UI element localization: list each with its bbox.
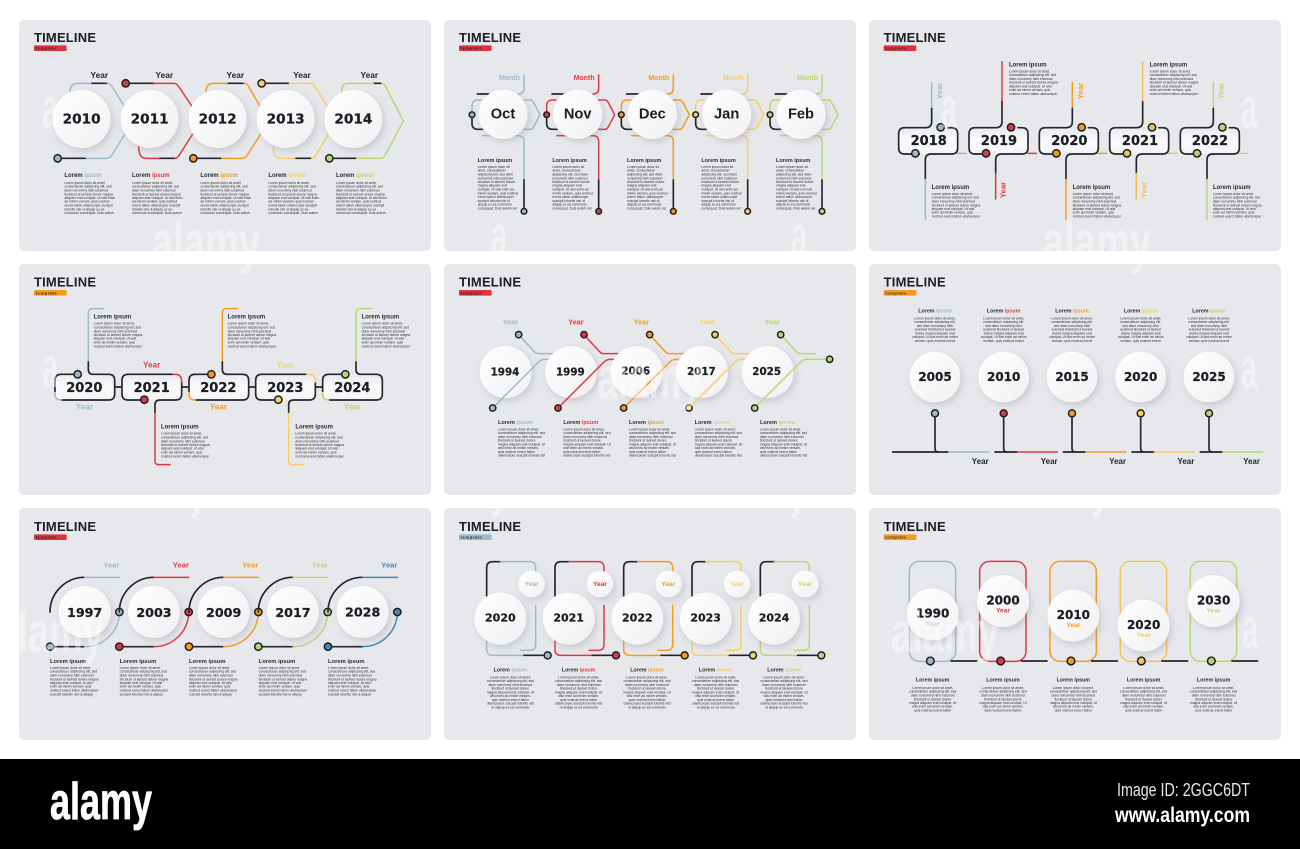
watermarks xyxy=(0,76,1258,665)
step Nov xyxy=(544,75,615,214)
step 2010 xyxy=(53,70,125,215)
step 2010: Year xyxy=(1066,622,1081,629)
step Feb: Lorem ipsum xyxy=(776,158,811,164)
step 2017 xyxy=(676,317,749,458)
step 2020: Lorem ipsum xyxy=(494,668,527,674)
step 2010: 2010 xyxy=(987,370,1020,384)
template badge xyxy=(459,290,492,296)
step Oct xyxy=(469,75,540,214)
watermarks: y xyxy=(1092,454,1108,519)
step 2024: Lorem ipsum xyxy=(362,315,399,321)
step 1997: 1997 xyxy=(67,605,102,620)
watermarks: a xyxy=(1242,596,1258,661)
step 2025: 2025 xyxy=(752,366,781,378)
step Dec xyxy=(618,75,689,214)
step 2011 xyxy=(121,70,193,215)
step 2018: Year xyxy=(935,83,944,99)
step Dec: Month xyxy=(648,75,669,82)
template badge xyxy=(34,290,67,296)
step 2024: 2024 xyxy=(759,612,790,625)
step 1994: Lorem ipsum xyxy=(498,420,533,426)
step 2017: Year xyxy=(699,317,715,326)
step 2000: Year xyxy=(996,607,1010,614)
title: TIMELINE xyxy=(459,519,521,534)
step 2021: Lorem ipsum xyxy=(562,668,596,674)
step 2019: 2019 xyxy=(981,134,1017,149)
step 2023 xyxy=(680,562,756,710)
template badge xyxy=(884,534,916,540)
template badge: template xyxy=(36,46,58,51)
step 2015: Year xyxy=(1109,457,1126,466)
step 2013: Year xyxy=(293,70,312,80)
step 2018: 2018 xyxy=(911,134,947,149)
step 2021: 2021 xyxy=(1122,134,1158,149)
step 2020 xyxy=(1115,309,1194,466)
step 2022: Year xyxy=(661,581,676,588)
step 2011: Year xyxy=(156,70,174,80)
step 2019: Year xyxy=(998,182,1007,198)
step 2024: Year xyxy=(344,403,362,412)
step 2005: Year xyxy=(972,457,989,466)
step 2020: 2020 xyxy=(66,381,102,396)
step 2014 xyxy=(324,70,403,215)
step 1990: 1990 xyxy=(916,607,949,621)
template badge: template xyxy=(885,46,907,51)
step 1999: Lorem ipsum xyxy=(563,420,598,426)
step 2021 xyxy=(543,562,619,710)
watermarks: y xyxy=(790,454,806,519)
step Dec: Dec xyxy=(639,107,666,123)
panel: timeline 2020-2024 frames xyxy=(444,508,856,740)
step 2011: Lorem ipsum xyxy=(132,173,170,179)
step 2028: Year xyxy=(381,561,397,570)
watermarks: alamy xyxy=(597,346,702,411)
step 2012: Lorem ipsum xyxy=(200,173,238,179)
step 2017: Lorem ipsum xyxy=(695,420,730,426)
step 1997 xyxy=(46,561,123,697)
step Feb: Lorem ipsum dolor sit amet, consectetuer adipiscing elit, sed diam nonummy nibh euismod tincidunt ut laoreet dolore magna aliquam erat volutpat. Ut wisi enim ad minim veniam, quis nostrud exerci tation ullamcorper suscipit lobortis nisl ut aliquip ex ea commodo consequat. Duis autem vel xyxy=(776,165,817,210)
step 2012: 2012 xyxy=(199,111,237,127)
template badge: template xyxy=(36,290,58,295)
step 1997: Year xyxy=(103,561,119,570)
title: TIMELINE xyxy=(884,275,946,290)
step 2020 xyxy=(474,562,551,710)
step 2022: 2022 xyxy=(200,381,236,396)
step 2025: Year xyxy=(1243,457,1260,466)
step 2010: Lorem ipsum xyxy=(987,309,1021,315)
template badge xyxy=(459,45,492,51)
panel: timeline 2018-2022 tags xyxy=(869,20,1281,251)
template badge: template xyxy=(461,290,483,295)
step 2022: Lorem ipsum xyxy=(1213,185,1251,191)
step Jan: Month xyxy=(723,75,744,82)
step 2022: 2022 xyxy=(622,612,653,625)
footer logo: alamy xyxy=(50,773,152,831)
step 2005 xyxy=(910,309,989,466)
step 2020 xyxy=(1039,82,1123,219)
step 2017: 2017 xyxy=(687,366,716,378)
footer bar xyxy=(0,759,1300,849)
step 2022: 2022 xyxy=(1192,134,1228,149)
step 2009: 2009 xyxy=(206,605,241,620)
step 2013: 2013 xyxy=(267,111,305,127)
step 2022 xyxy=(611,562,688,710)
watermarks: a xyxy=(1241,76,1257,141)
panel: timeline 1997-2028 arcs xyxy=(19,508,431,740)
step 2021: Lorem ipsum xyxy=(161,425,199,431)
step 2006: 2006 xyxy=(621,365,650,377)
step 2020: Year xyxy=(1137,632,1151,639)
step 2017: 2017 xyxy=(275,605,311,620)
step 2020 xyxy=(1118,561,1188,713)
step 2023: Year xyxy=(730,581,744,588)
step 2010: Year xyxy=(91,70,109,80)
step 2021: 2021 xyxy=(553,612,584,625)
step 2021: Year xyxy=(593,581,607,588)
step 2020: Year xyxy=(76,403,94,412)
watermarks: alamy xyxy=(1043,210,1151,275)
step 2021 xyxy=(1110,62,1200,199)
step 2025 xyxy=(742,317,833,458)
step 2020: Lorem ipsum xyxy=(94,315,131,321)
step 2022: Year xyxy=(210,403,228,412)
watermarks: a xyxy=(1241,336,1257,401)
step 2020: Year xyxy=(1076,83,1085,99)
template badge: template xyxy=(461,46,483,51)
website: www.alamy.com xyxy=(1114,804,1250,827)
step 2028: 2028 xyxy=(345,604,380,619)
step 2030: Year xyxy=(1207,608,1221,615)
step 2003 xyxy=(116,561,192,697)
watermarks: a xyxy=(791,204,807,269)
step 2020: 2020 xyxy=(1127,618,1160,632)
step Oct: Oct xyxy=(491,107,515,123)
connectors xyxy=(115,384,323,389)
step 2017: Lorem ipsum dolor sit amet, consectetuer adipiscing elit, sed diam nonummy nibh euismod tincidunt ut laoreet dolore magna aliquam erat volutpat. Ut wisi enim ad minim veniam, quis nostrud exerci tation ullamcorper suscipit lobortis nisl ut aliquip xyxy=(259,666,307,696)
step 1999: Year xyxy=(568,317,584,326)
step 1997: Lorem ipsum dolor sit amet, consectetuer adipiscing elit, sed diam nonummy nibh euismod tincidunt ut laoreet dolore magna aliquam erat volutpat. Ut wisi enim ad minim veniam, quis nostrud exerci tation ullamcorper suscipit lobortis nisl ut aliquip xyxy=(50,666,99,696)
step 2028: Lorem ipsum xyxy=(328,659,365,665)
step 2010: Lorem ipsum xyxy=(1057,678,1090,684)
step 1990: Year xyxy=(926,621,940,628)
step 1997: Lorem ipsum xyxy=(50,659,87,665)
step 2023: 2023 xyxy=(267,381,303,396)
step 2009 xyxy=(185,561,262,697)
step 2023: Lorem ipsum xyxy=(699,668,733,674)
step 2024 xyxy=(323,309,412,412)
step 2017: Year xyxy=(312,561,328,570)
step 2023: 2023 xyxy=(690,612,721,625)
step 2000: Lorem ipsum dolor sit amet, consectetuer adipiscing elit, sed diam nonummy nibh euismod tincidunt ut laoreet dolore magna aliquam erat volutpat. Ut wisi enim ad minim veniam, quis nostrud exerci tation xyxy=(979,686,1027,713)
step 2014: Lorem ipsum xyxy=(336,173,374,179)
step 2020: Lorem ipsum xyxy=(1127,678,1161,684)
step 2020: Year xyxy=(525,581,539,588)
step 2005: 2005 xyxy=(918,370,952,384)
step 1990 xyxy=(907,561,977,713)
step 2009: Lorem ipsum dolor sit amet, consectetuer adipiscing elit, sed diam nonummy nibh euismod tincidunt ut laoreet dolore magna aliquam erat volutpat. Ut wisi enim ad minim veniam, quis nostrud exerci tation ullamcorper suscipit lobortis nisl ut aliquip xyxy=(189,666,238,696)
step 2022 xyxy=(1180,82,1263,219)
step 2021: Year xyxy=(1140,182,1149,198)
panel: timeline 1990-2030 capsules xyxy=(869,508,1281,740)
step Oct: Month xyxy=(499,75,520,82)
step 2000 xyxy=(977,561,1047,713)
panel: timeline 2005-2025 pins xyxy=(869,264,1281,495)
step 2024: 2024 xyxy=(334,381,370,396)
step 1999 xyxy=(545,317,618,458)
template badge xyxy=(884,290,916,296)
step 2000: 2000 xyxy=(986,593,1020,607)
panel: timeline 1994-2025 branches xyxy=(444,264,856,495)
step Nov: Lorem ipsum xyxy=(552,158,587,164)
step 2020: 2020 xyxy=(485,612,516,625)
step 2025: 2025 xyxy=(1192,370,1226,384)
step 2020: Lorem ipsum dolor sit amet, consectetuer adipiscing elit, sed diam nonummy nibh euismod tincidunt ut laoreet dolore magna aliquam erat volutpat. Ut wisi enim ad minim veniam, quis nostrud exerci tation xyxy=(1120,686,1167,713)
template badge xyxy=(459,534,492,540)
watermarks: a xyxy=(491,204,507,269)
step 2022: Lorem ipsum xyxy=(630,668,664,674)
step 2022: Lorem ipsum xyxy=(228,315,265,321)
step Jan xyxy=(693,75,764,214)
step Dec: Lorem ipsum dolor sit amet, consectetuer adipiscing elit, sed diam nonummy nibh euismod tincidunt ut laoreet dolore magna aliquam erat volutpat. Ut wisi enim ad minim veniam, quis nostrud exerci tation ullamcorper suscipit lobortis nisl ut aliquip ex ea commodo consequat. Duis autem vel xyxy=(627,165,668,210)
step 2015 xyxy=(1047,309,1126,466)
watermarks: alamy xyxy=(891,600,999,665)
title: TIMELINE xyxy=(884,519,946,534)
template badge: template xyxy=(36,535,58,540)
step 2017: Lorem ipsum xyxy=(259,659,295,665)
title: TIMELINE xyxy=(459,30,521,45)
step 2003: Year xyxy=(173,561,189,570)
step 2012: Year xyxy=(227,70,245,80)
step 2025 xyxy=(1184,309,1263,466)
step Oct: Lorem ipsum xyxy=(478,158,512,164)
step 2000: Lorem ipsum xyxy=(986,678,1020,684)
step Feb: Feb xyxy=(788,107,814,123)
step 2013 xyxy=(257,70,328,215)
image id: Image ID: 2GGC6DT xyxy=(1117,780,1250,800)
step Oct: Lorem ipsum dolor sit amet, consectetuer adipiscing elit, sed diam nonummy nibh euismod tincidunt ut laoreet dolore magna aliquam erat volutpat. Ut wisi enim ad minim veniam, quis nostrud exerci tation ullamcorper suscipit lobortis nisl ut aliquip ex ea commodo consequat. Duis autem vel xyxy=(478,165,518,210)
step 2003: Lorem ipsum dolor sit amet, consectetuer adipiscing elit, sed diam nonummy nibh euismod tincidunt ut laoreet dolore magna aliquam erat volutpat. Ut wisi enim ad minim veniam, quis nostrud exerci tation ullamcorper suscipit lobortis nisl ut aliquip xyxy=(120,666,168,696)
step 2030: Lorem ipsum xyxy=(1197,678,1231,684)
panel: timeline 2010-2014 hexagon xyxy=(19,20,431,251)
title: TIMELINE xyxy=(34,30,96,45)
step 2005: Lorem ipsum xyxy=(918,309,952,315)
step 2018 xyxy=(899,82,982,219)
step 2020: Lorem ipsum xyxy=(1073,185,1110,191)
step 2014: Year xyxy=(361,70,379,80)
step Jan: Lorem ipsum dolor sit amet, consectetuer adipiscing elit, sed diam nonummy nibh euismod tincidunt ut laoreet dolore magna aliquam erat volutpat. Ut wisi enim ad minim veniam, quis nostrud exerci tation ullamcorper suscipit lobortis nisl ut aliquip ex ea commodo consequat. Duis autem vel xyxy=(701,165,742,210)
step 2010: 2010 xyxy=(1057,608,1090,622)
step 2010: 2010 xyxy=(63,111,101,127)
step 2028: Lorem ipsum dolor sit amet, consectetuer adipiscing elit, sed diam nonummy nibh euismod tincidunt ut laoreet dolore magna aliquam erat volutpat. Ut wisi enim ad minim veniam, quis nostrud exerci tation ullamcorper suscipit lobortis nisl ut aliquip xyxy=(328,666,377,696)
template badge xyxy=(34,45,67,51)
step 2021: Lorem ipsum xyxy=(1150,62,1187,68)
step 2014: 2014 xyxy=(334,111,372,127)
step Feb: Month xyxy=(797,75,818,82)
watermarks: a xyxy=(42,76,58,141)
template badge: template xyxy=(885,290,907,295)
step 2010: Year xyxy=(1041,457,1058,466)
step 2020: 2020 xyxy=(1124,370,1157,384)
title: TIMELINE xyxy=(34,519,96,534)
template badge xyxy=(34,534,67,540)
step 2021: 2021 xyxy=(134,381,170,396)
watermarks: alamy xyxy=(152,210,260,275)
step 2020: 2020 xyxy=(1051,134,1087,149)
axis start xyxy=(893,449,926,454)
watermarks: y xyxy=(491,454,507,519)
step 2028 xyxy=(324,561,401,697)
step Feb xyxy=(767,75,838,214)
step 1994 xyxy=(480,317,553,458)
step 2010 xyxy=(978,309,1058,466)
step 2019: Lorem ipsum xyxy=(1009,62,1047,68)
watermarks: a xyxy=(42,335,58,400)
step 1990: Lorem ipsum dolor sit amet, consectetuer adipiscing elit, sed diam nonummy nibh euismod tincidunt ut laoreet dolore magna aliquam erat volutpat. Ut wisi enim ad minim veniam, quis nostrud exerci tation xyxy=(909,686,956,713)
step Dec: Lorem ipsum xyxy=(627,158,662,164)
step 2006 xyxy=(611,317,684,458)
step 2017 xyxy=(255,561,331,697)
step 2030: Lorem ipsum dolor sit amet, consectetuer adipiscing elit, sed diam nonummy nibh euismod tincidunt ut laoreet dolore magna aliquam erat volutpat. Ut wisi enim ad minim veniam, quis nostrud exerci tation xyxy=(1190,686,1237,713)
step 2024 xyxy=(748,562,825,710)
step 2030: 2030 xyxy=(1197,593,1230,607)
watermarks: a xyxy=(941,76,957,141)
template badge: template xyxy=(461,535,483,540)
step 2011: 2011 xyxy=(131,111,169,127)
step 2025: Year xyxy=(765,317,780,326)
step 2006: Year xyxy=(634,317,649,326)
step 2030 xyxy=(1188,561,1258,713)
step 2009: Lorem ipsum xyxy=(189,659,226,665)
title: TIMELINE xyxy=(459,275,521,290)
step 1999: 1999 xyxy=(556,367,585,379)
watermarks: alamy xyxy=(0,600,104,665)
step 2012 xyxy=(189,70,261,215)
step 2018: Lorem ipsum xyxy=(932,185,969,191)
step 2019 xyxy=(969,62,1059,199)
step 2010: Lorem ipsum dolor sit amet, consectetuer adipiscing elit, sed diam nonummy nibh euismod tincidunt ut laoreet dolore magna aliquam erat volutpat. Ut wisi enim ad minim veniam, quis nostrud exerci tation xyxy=(1050,686,1097,713)
template badge xyxy=(884,45,916,51)
step 1990: Lorem ipsum xyxy=(916,678,950,684)
step 2010 xyxy=(1047,561,1117,713)
step 2023 xyxy=(256,361,345,465)
step 2025: Lorem ipsum xyxy=(1192,309,1226,315)
step Jan: Jan xyxy=(714,107,739,123)
step 2003: 2003 xyxy=(136,605,172,620)
step 2021 xyxy=(122,361,211,465)
step 2009: Year xyxy=(242,561,258,570)
step Nov: Month xyxy=(574,75,595,82)
step 2022: Year xyxy=(1217,83,1226,99)
step 2024: Year xyxy=(798,581,812,588)
step 2015: 2015 xyxy=(1055,370,1089,384)
step Nov: Lorem ipsum dolor sit amet, consectetuer adipiscing elit, sed diam nonummy nibh euismod tincidunt ut laoreet dolore magna aliquam erat volutpat. Ut wisi enim ad minim veniam, quis nostrud exerci tation ullamcorper suscipit lobortis nisl ut aliquip ex ea commodo consequat. Duis autem vel xyxy=(552,165,593,210)
watermarks: y xyxy=(190,454,206,519)
step 2006: Lorem ipsum xyxy=(629,420,664,426)
title: TIMELINE xyxy=(884,30,946,45)
step 2025: Lorem ipsum xyxy=(760,420,795,426)
panel: timeline months xyxy=(444,20,856,251)
step 2020: Lorem ipsum xyxy=(1124,309,1158,315)
title: TIMELINE xyxy=(34,275,96,290)
step 2015: Lorem ipsum xyxy=(1055,309,1089,315)
template badge: template xyxy=(885,535,907,540)
step 2021: Year xyxy=(143,361,161,370)
step 1994: Year xyxy=(503,317,518,326)
step 2023: Year xyxy=(277,361,295,370)
step 1994: 1994 xyxy=(491,367,519,379)
step Nov: Nov xyxy=(564,107,592,123)
step 2003: Lorem ipsum xyxy=(120,659,156,665)
step 2024: Lorem ipsum xyxy=(767,668,801,674)
panel: timeline 2020-2024 linked boxes xyxy=(19,264,431,495)
step 2023: Lorem ipsum xyxy=(295,425,333,431)
step 2020 xyxy=(55,309,144,412)
step 2013: Lorem ipsum xyxy=(268,173,306,179)
step 2020: Year xyxy=(1177,457,1194,466)
step 2010: Lorem ipsum xyxy=(64,173,102,179)
step 2022 xyxy=(189,309,278,412)
step Jan: Lorem ipsum xyxy=(701,158,736,164)
